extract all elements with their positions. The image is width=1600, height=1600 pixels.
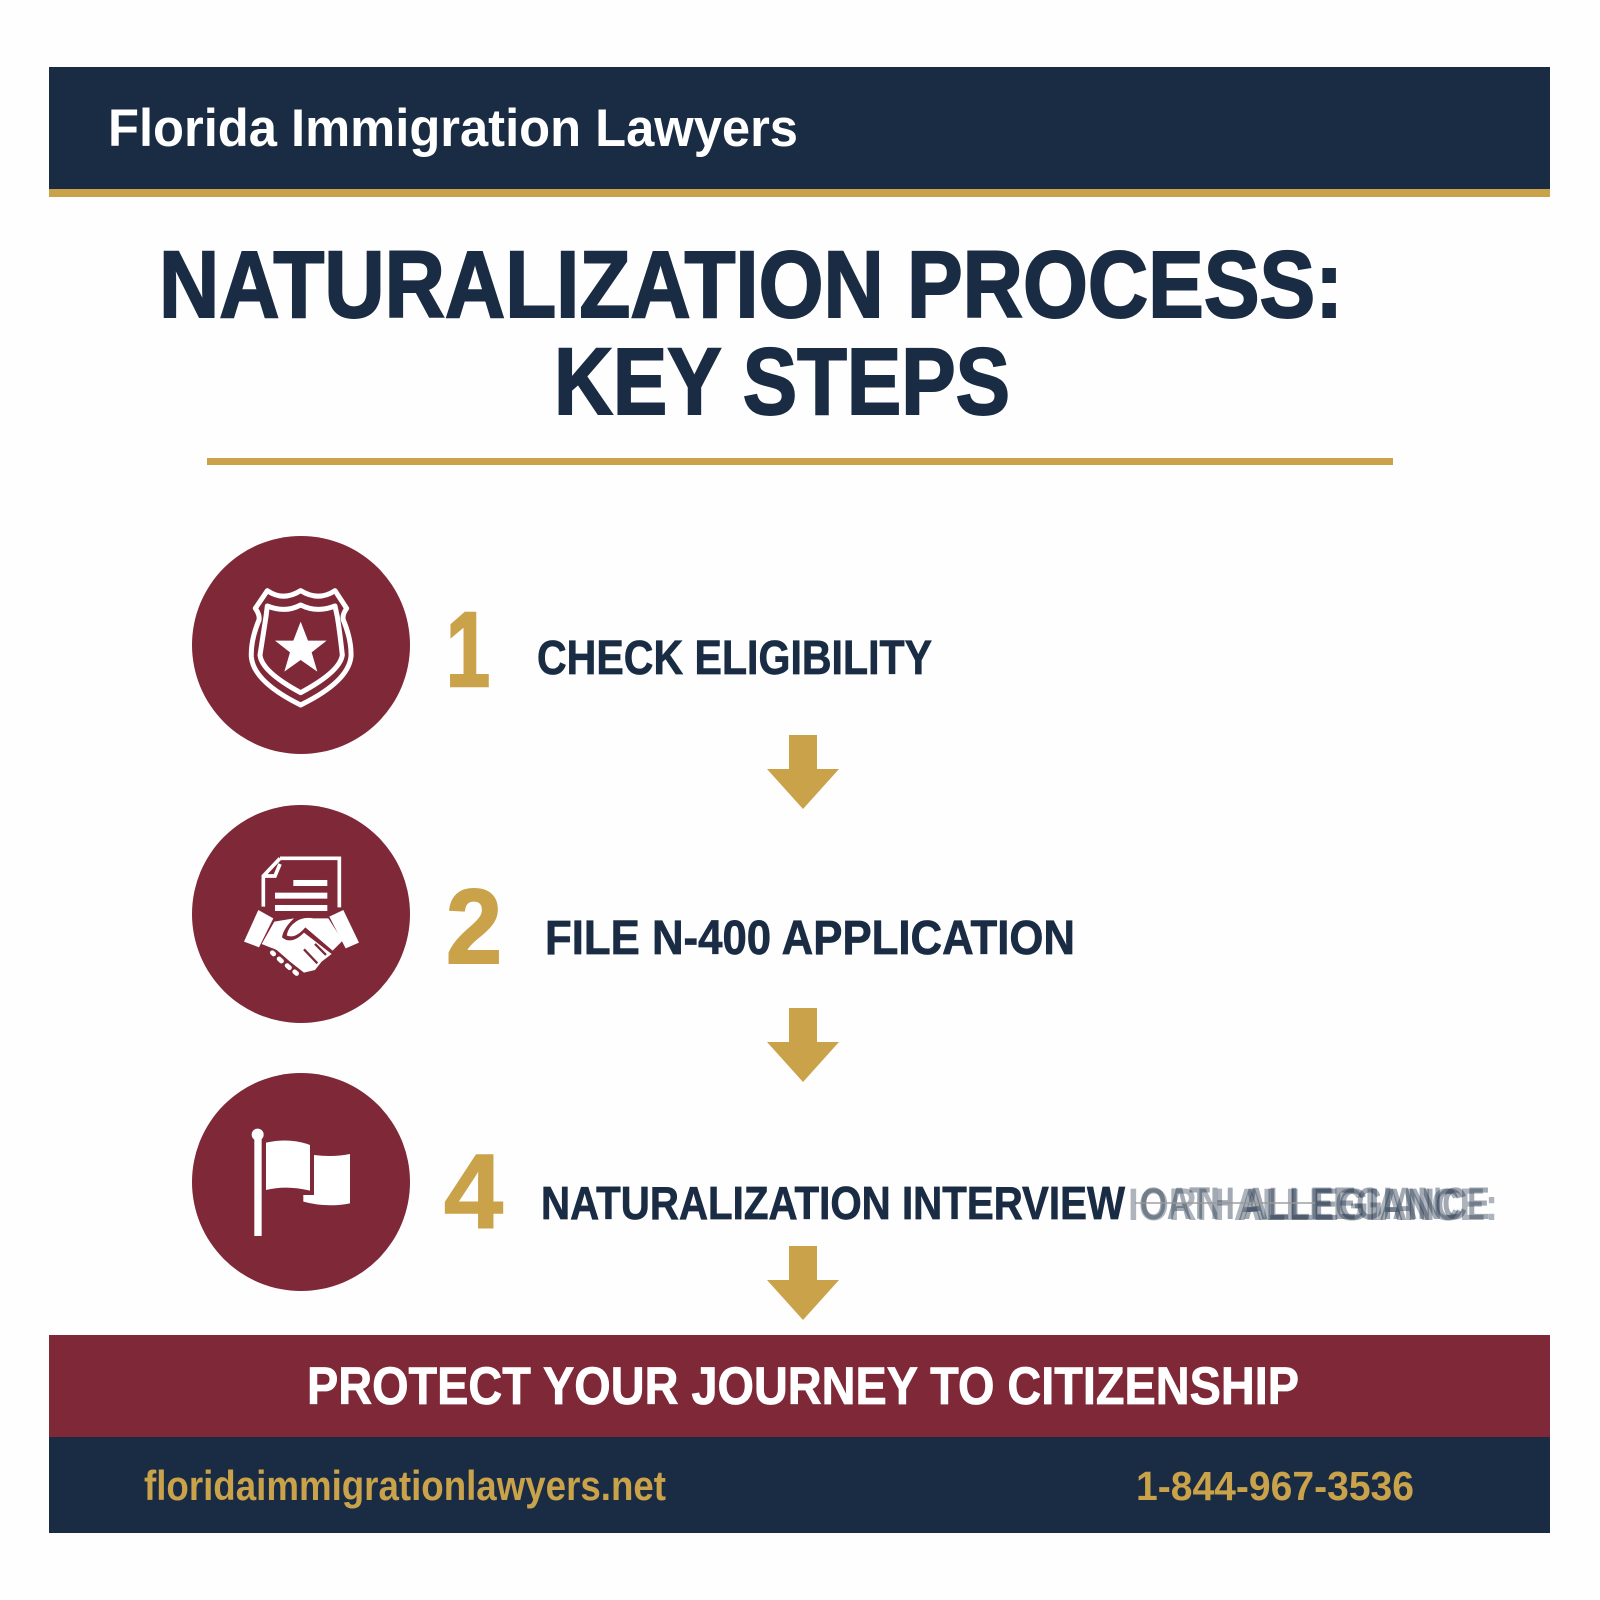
- title: [159, 232, 1343, 435]
- step 1: [192, 536, 932, 754]
- step 3: [192, 1073, 1498, 1291]
- icon: flag: [192, 1073, 410, 1291]
- garbled overlapping text: OATH ALLEEGIANCE: [1140, 1178, 1490, 1229]
- garbled overlapping text: IORN ALLEGIANCE:: [1128, 1179, 1498, 1230]
- call to action band: [49, 1335, 1550, 1438]
- phone number: 1-844-967-3536: [1136, 1463, 1414, 1509]
- website: floridaimmigrationlawyers.net: [144, 1462, 666, 1509]
- header band: [49, 67, 1550, 197]
- garbled overlapping text: ALLEGIANC: [1238, 1179, 1463, 1230]
- step number 4: 4: [444, 1133, 503, 1251]
- step label: CHECK ELIGIBILITY: [537, 632, 932, 685]
- step number 2: 2: [446, 868, 502, 986]
- call to action text: PROTECT YOUR JOURNEY TO CITIZENSHIP: [307, 1357, 1299, 1416]
- arrow 3: [767, 1246, 839, 1320]
- title: NATURALIZATION PROCESS:: [159, 232, 1343, 338]
- title: KEY STEPS: [554, 329, 1010, 435]
- icon: document and handshake: [192, 805, 410, 1023]
- footer band: [49, 1437, 1550, 1533]
- arrow 1: [767, 735, 839, 809]
- icon: shield with star: [192, 536, 410, 754]
- header firm name: Florida Immigration Lawyers: [108, 99, 798, 158]
- arrow 2: [767, 1008, 839, 1082]
- step label: NATURALIZATION INTERVIEW: [541, 1177, 1125, 1229]
- step 2: [192, 805, 1075, 1023]
- step number 1: 1: [446, 591, 490, 709]
- step label: FILE N-400 APPLICATION: [545, 912, 1075, 965]
